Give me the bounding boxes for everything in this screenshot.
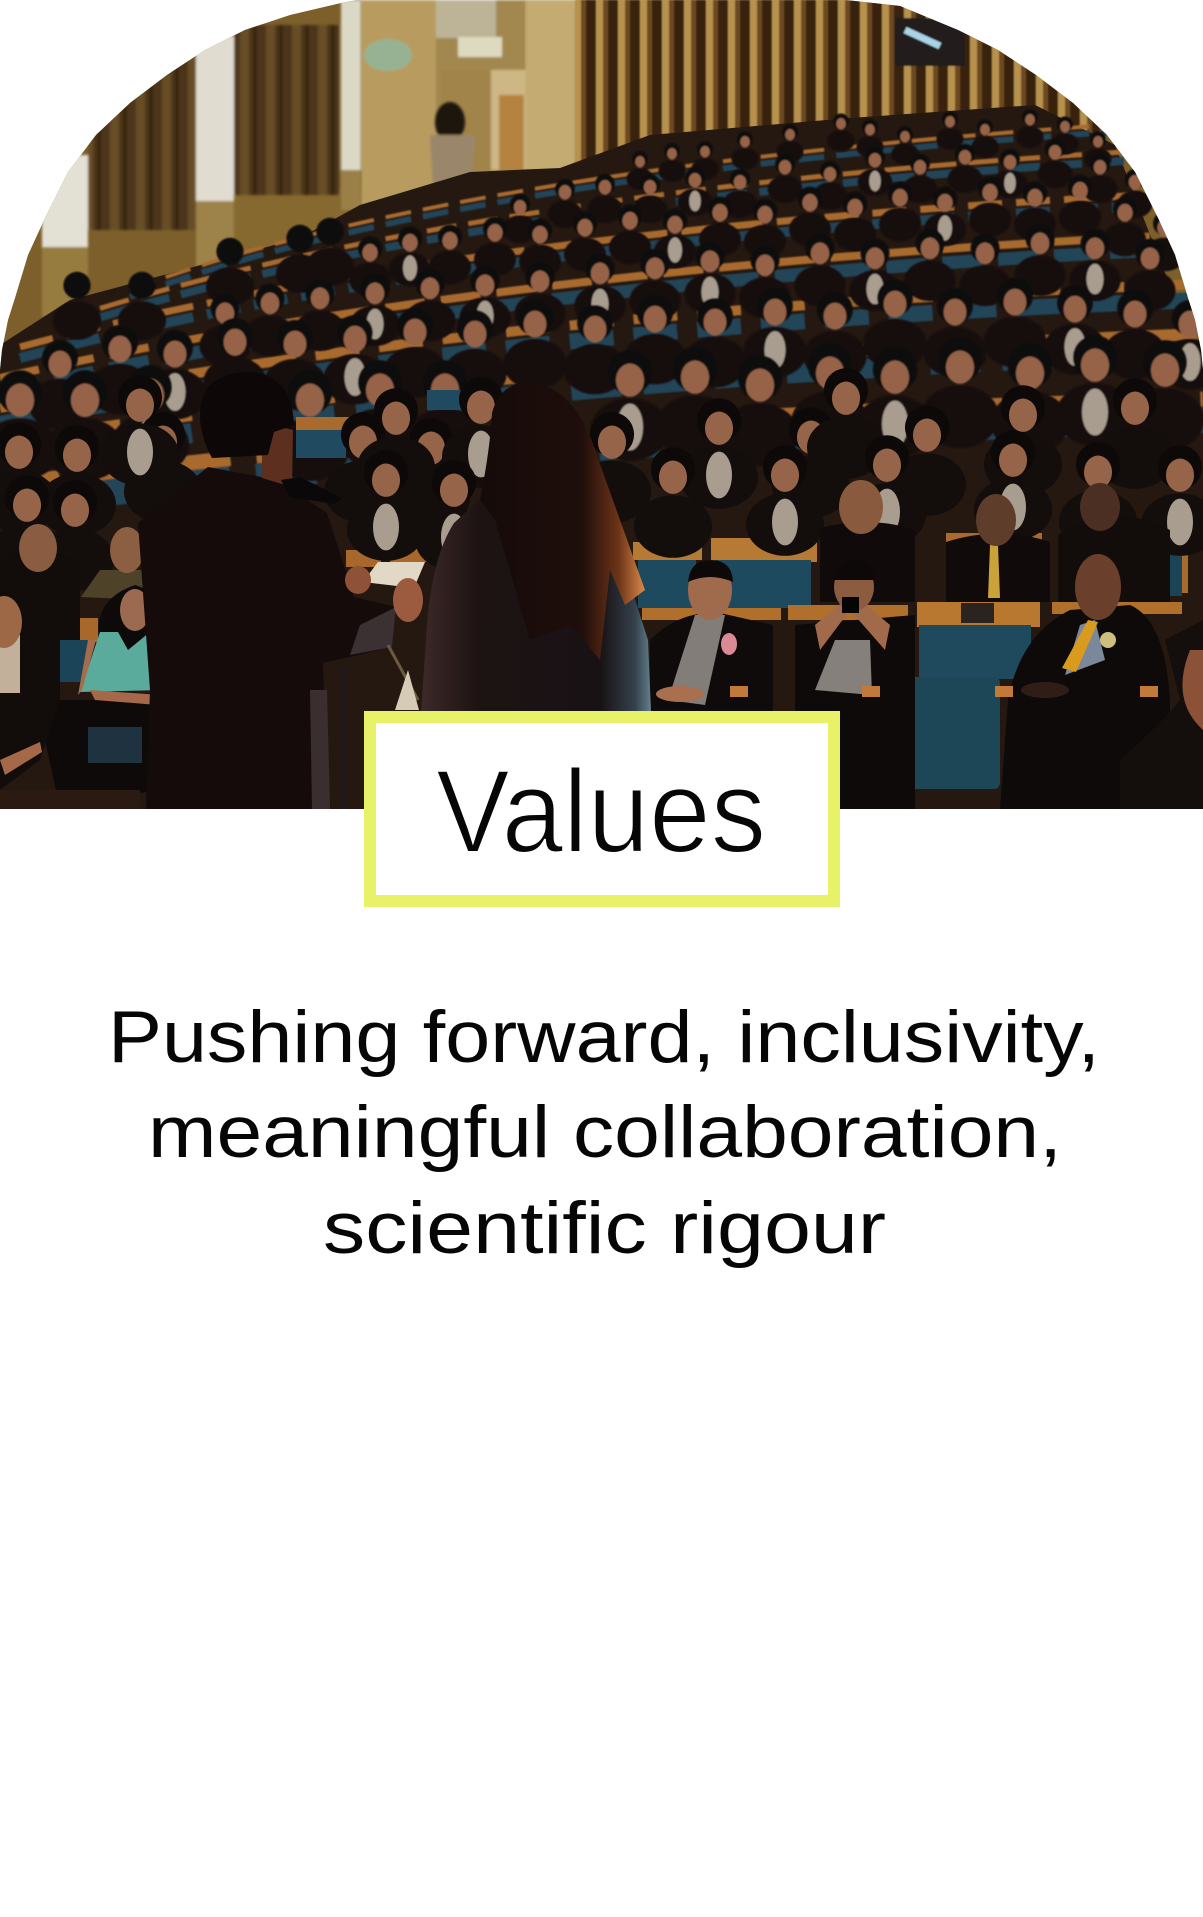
audience back rows [0, 109, 1203, 481]
values description: Pushing forward, inclusivity, [108, 997, 1100, 1078]
front row seats [27, 390, 1188, 789]
standing figure at door [430, 100, 476, 183]
arched auditorium photo [0, 0, 1203, 810]
title text: Values [436, 746, 766, 878]
speaker man [138, 372, 425, 810]
man with yellow tie [730, 554, 1203, 809]
woman with long hair [421, 382, 651, 711]
infographic canvas [0, 0, 1203, 1268]
values description [108, 997, 1100, 1269]
seated man with flower [650, 560, 773, 720]
back wall [0, 0, 1203, 370]
title box [370, 717, 834, 901]
wood slat wall [525, 0, 1100, 170]
man with phone [795, 560, 915, 809]
seat rows [0, 125, 1203, 506]
values description: scientific rigour [323, 1188, 886, 1269]
left front man [0, 596, 140, 809]
crowd base [0, 105, 1203, 809]
values description: meaningful collaboration, [148, 1092, 1062, 1173]
woman in teal top [46, 585, 150, 793]
audience middle rows [0, 368, 1203, 640]
curtains and white columns [42, 0, 361, 317]
